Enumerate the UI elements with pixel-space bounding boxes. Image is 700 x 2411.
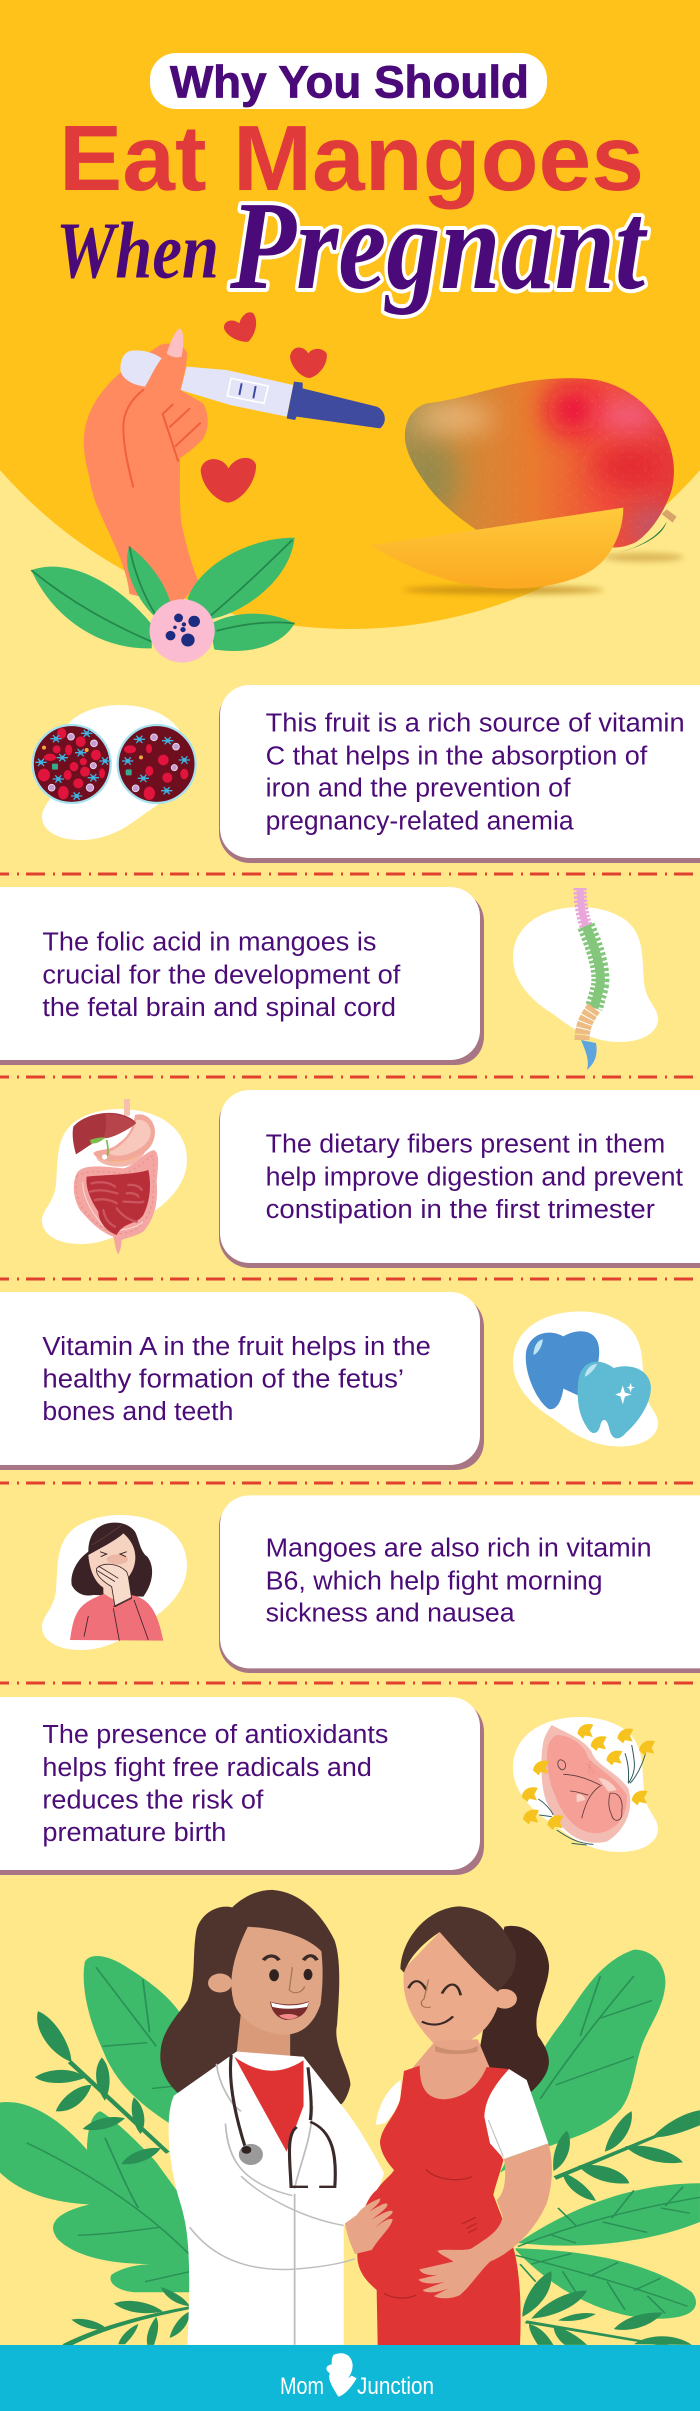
card 4 text: Vitamin A in the fruit helps in the	[42, 1333, 431, 1361]
logo wordmark junction: Junction	[357, 2373, 434, 2400]
title	[56, 53, 648, 316]
card 4 text: healthy formation of the fetus’	[42, 1365, 404, 1393]
icon: teeth	[513, 1312, 658, 1446]
doctor	[160, 1890, 384, 2345]
card 2 text: The folic acid in mangoes is	[42, 929, 376, 957]
card 2 text: the fetal brain and spinal cord	[42, 994, 396, 1022]
card 5 text	[266, 1535, 652, 1628]
card 1 text: C that helps in the absorption of	[266, 742, 648, 770]
card 6 text	[42, 1721, 388, 1847]
card 5 text: B6, which help fight morning	[266, 1568, 603, 1596]
background leaves	[0, 1950, 700, 2319]
title line: eat mangoes: Eat Mangoes	[59, 106, 644, 210]
card 6 text: reduces the risk of	[42, 1786, 264, 1814]
mango	[370, 373, 683, 594]
card 5	[219, 1495, 700, 1673]
card 3	[219, 1090, 700, 1268]
title line: when: When	[56, 208, 219, 296]
card 1 text: This fruit is a rich source of vitamin	[266, 709, 685, 737]
hand	[84, 343, 208, 605]
card 1 text: iron and the prevention of	[266, 775, 572, 803]
logo wordmark mom: Mom	[280, 2373, 324, 2400]
card 3 text	[266, 1131, 683, 1224]
icon: fetus	[513, 1717, 658, 1852]
title line: pregnant: Pregnant	[229, 177, 648, 316]
title line: why you should: Why You Should	[170, 57, 529, 108]
patient head	[400, 1906, 549, 2102]
icon: spine	[513, 888, 658, 1070]
card 1	[219, 685, 700, 863]
logo mark	[326, 2353, 357, 2397]
card 2	[0, 887, 484, 1065]
card 2 text: crucial for the development of	[42, 962, 401, 990]
hearts	[201, 312, 327, 503]
card 4	[0, 1292, 484, 1470]
branches	[35, 2011, 700, 2348]
leaves and flower	[31, 538, 295, 663]
card 6	[0, 1697, 484, 1875]
card 1 text: pregnancy-related anemia	[266, 807, 574, 835]
divider	[0, 874, 700, 1683]
card 4 text	[42, 1333, 431, 1426]
footer bar	[0, 2345, 700, 2411]
card 6 text: The presence of antioxidants	[42, 1721, 388, 1749]
logo	[280, 2353, 434, 2400]
icon: woman with nausea	[42, 1515, 187, 1650]
icon: digestive system	[42, 1099, 187, 1254]
card 3 text: The dietary fibers present in them	[266, 1131, 665, 1159]
pregnancy test stick	[120, 328, 385, 428]
card 3 text: help improve digestion and prevent	[266, 1164, 683, 1192]
card 5 text: Mangoes are also rich in vitamin	[266, 1535, 652, 1563]
title pill	[150, 53, 547, 109]
icon: blood cells	[33, 705, 196, 840]
patient body and doctor hand	[345, 2066, 552, 2345]
card 6 text: premature birth	[42, 1819, 226, 1847]
doctor and patient illustration	[0, 1890, 700, 2348]
card 5 text: sickness and nausea	[266, 1600, 515, 1628]
mango slice	[370, 508, 623, 594]
card 2 text	[42, 929, 401, 1022]
header yellow circle	[0, 0, 700, 629]
hand holding pregnancy test with hearts	[84, 312, 385, 605]
card 4 text: bones and teeth	[42, 1398, 233, 1426]
card 3 text: constipation in the first trimester	[266, 1196, 655, 1224]
card 6 text: helps fight free radicals and	[42, 1754, 372, 1782]
card 1 text	[266, 709, 685, 835]
